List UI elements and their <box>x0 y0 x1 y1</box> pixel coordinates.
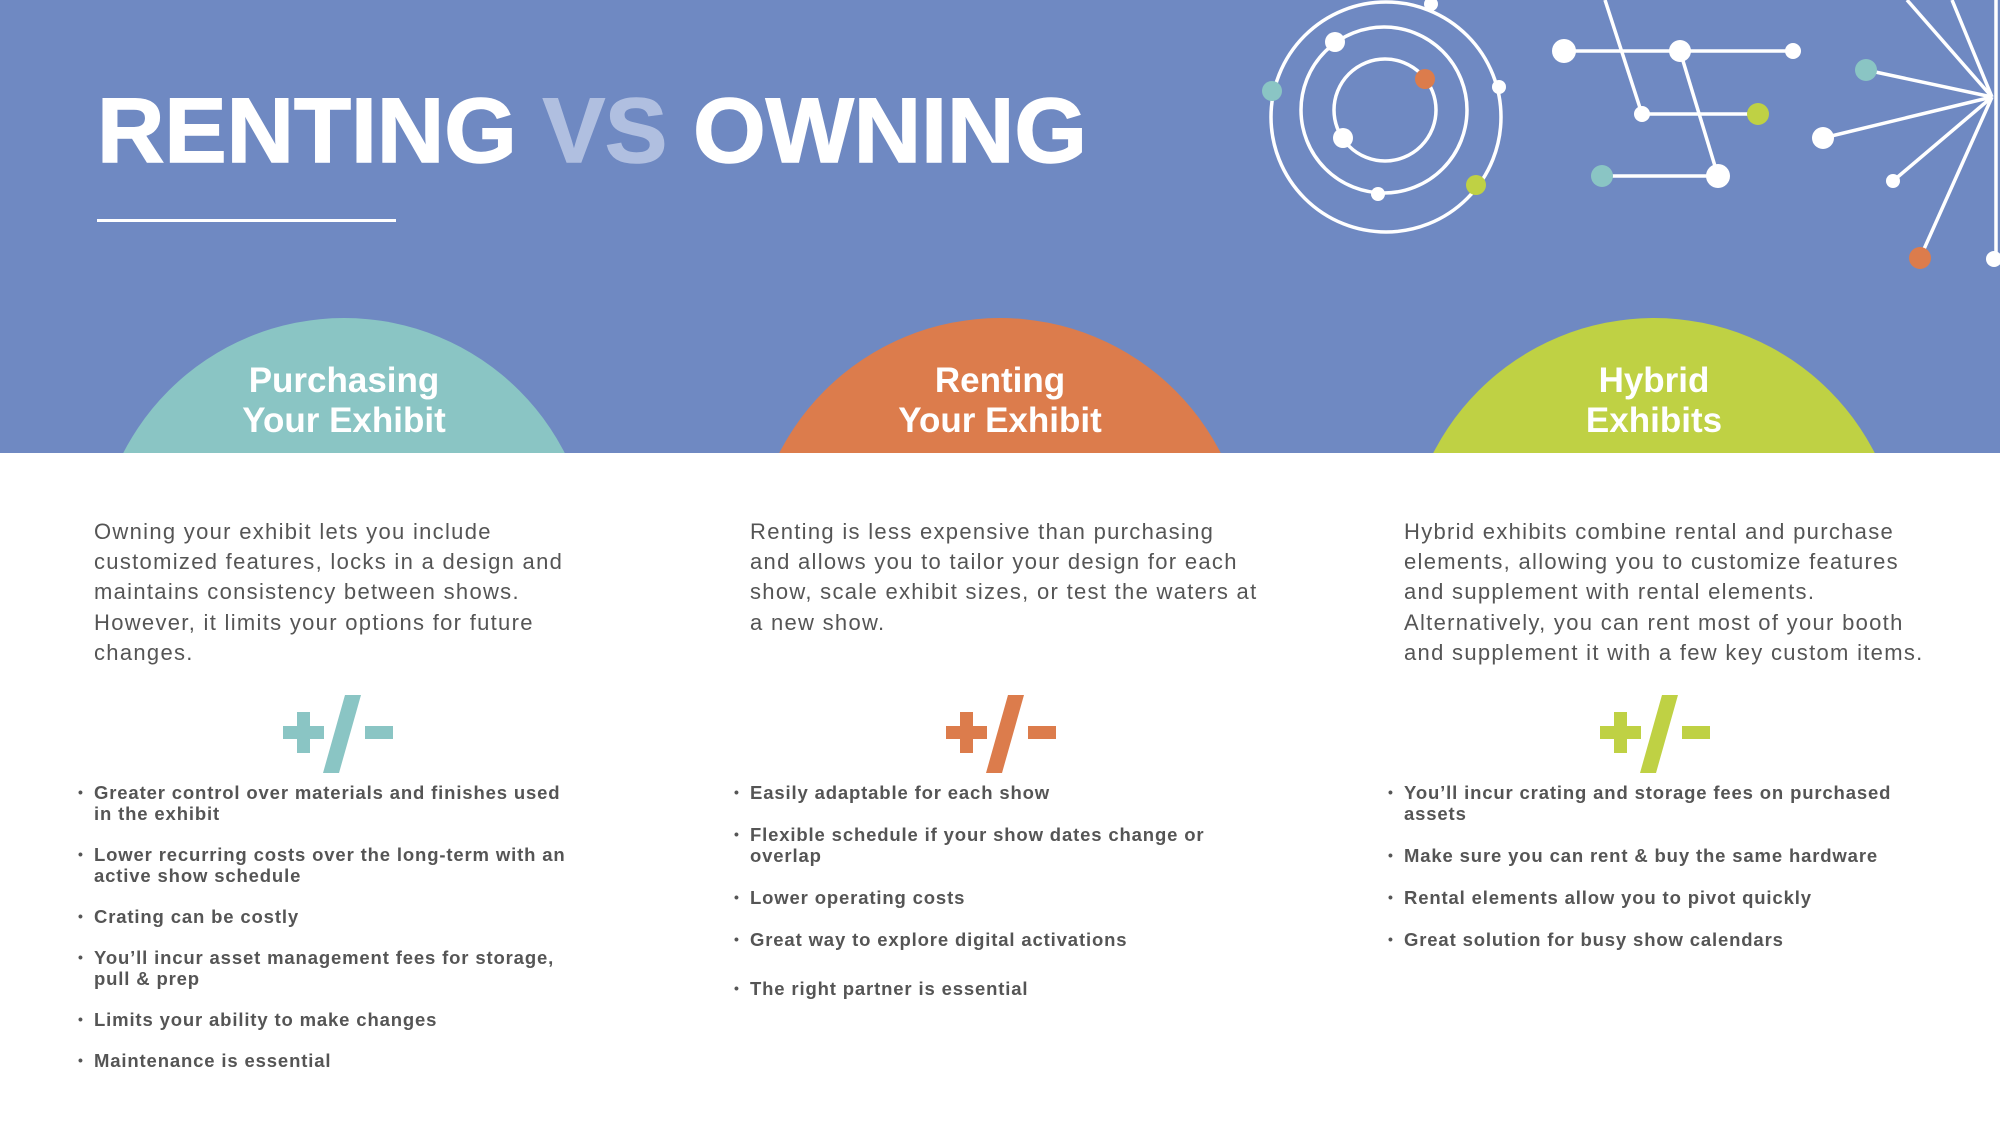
bullets: renting: The right partner is essential <box>750 978 1028 999</box>
bullets: renting: Lower operating costs <box>750 887 965 908</box>
text: purchasing: customized features, locks in a design and <box>94 549 563 574</box>
text: purchasing: Owning your exhibit lets you include <box>94 519 492 544</box>
bullets: renting <box>734 782 1204 999</box>
bullets: purchasing <box>78 782 566 1071</box>
bullets: purchasing: Crating can be costly <box>94 906 299 927</box>
header background <box>0 0 2000 453</box>
title: RENTING VS OWNING <box>97 80 1087 182</box>
heading: purchasing: Purchasing <box>249 361 439 400</box>
bullets: hybrid <box>1388 782 1891 950</box>
heading: purchasing <box>242 361 446 440</box>
bullets: purchasing: in the exhibit <box>94 803 220 824</box>
bullets: purchasing: Greater control over materials and finishes used <box>94 782 560 803</box>
icon: plus/minus orange <box>946 695 1056 773</box>
bullets: renting: Flexible schedule if your show dates change or <box>750 824 1204 845</box>
heading: renting: Renting <box>935 361 1065 400</box>
semicircle: renting <box>779 318 1221 453</box>
text: hybrid: elements, allowing you to customize features <box>1404 549 1899 574</box>
text: renting <box>750 519 1258 635</box>
bullets: purchasing: Maintenance is essential <box>94 1050 331 1071</box>
text: renting: and allows you to tailor your design for each <box>750 549 1238 574</box>
text: hybrid: Alternatively, you can rent most of your booth <box>1404 610 1904 635</box>
decoration and semicircles <box>123 0 2000 453</box>
decoration: orbits <box>1271 2 1501 232</box>
text: purchasing <box>94 519 563 665</box>
semicircle: purchasing <box>123 318 565 453</box>
decoration: network <box>1564 0 1996 259</box>
bullets: purchasing: You’ll incur asset management fees for storage, <box>94 947 554 968</box>
bullets: hybrid: Make sure you can rent & buy the same hardware <box>1404 845 1878 866</box>
bullets: purchasing: pull & prep <box>94 968 200 989</box>
text: hybrid: and supplement it with a few key custom items. <box>1404 640 1924 665</box>
bullets: renting: overlap <box>750 845 822 866</box>
heading: hybrid: Hybrid <box>1599 361 1709 400</box>
heading: renting <box>898 361 1102 440</box>
heading: hybrid: Exhibits <box>1586 401 1722 440</box>
text: renting: show, scale exhibit sizes, or test the waters at <box>750 579 1258 604</box>
heading: purchasing: Your Exhibit <box>242 401 446 440</box>
title underline <box>97 219 396 222</box>
bullets: renting: Great way to explore digital activations <box>750 929 1127 950</box>
icon: plus/minus lime <box>1600 695 1710 773</box>
bullets: purchasing: Lower recurring costs over the long-term with an <box>94 844 566 865</box>
bullets: renting: Easily adaptable for each show <box>750 782 1050 803</box>
text: hybrid <box>1404 519 1924 665</box>
icon: plus/minus teal <box>283 695 393 773</box>
bullets: hybrid: assets <box>1404 803 1467 824</box>
heading: hybrid <box>1586 361 1722 440</box>
bullets: purchasing: Limits your ability to make changes <box>94 1009 437 1030</box>
bullets: hybrid: Great solution for busy show calendars <box>1404 929 1784 950</box>
text: hybrid: Hybrid exhibits combine rental and purchase <box>1404 519 1894 544</box>
text: purchasing: maintains consistency between shows. <box>94 579 520 604</box>
text: purchasing: However, it limits your options for future <box>94 610 534 635</box>
bullets: hybrid: You’ll incur crating and storage fees on purchased <box>1404 782 1891 803</box>
semicircle: hybrid <box>1433 318 1875 453</box>
text: purchasing: changes. <box>94 640 194 665</box>
heading: renting: Your Exhibit <box>898 401 1102 440</box>
bullets: purchasing: active show schedule <box>94 865 301 886</box>
text: renting: a new show. <box>750 610 885 635</box>
bullets: hybrid: Rental elements allow you to pivot quickly <box>1404 887 1812 908</box>
text: renting: Renting is less expensive than purchasing <box>750 519 1214 544</box>
text: hybrid: and supplement with rental elements. <box>1404 579 1815 604</box>
